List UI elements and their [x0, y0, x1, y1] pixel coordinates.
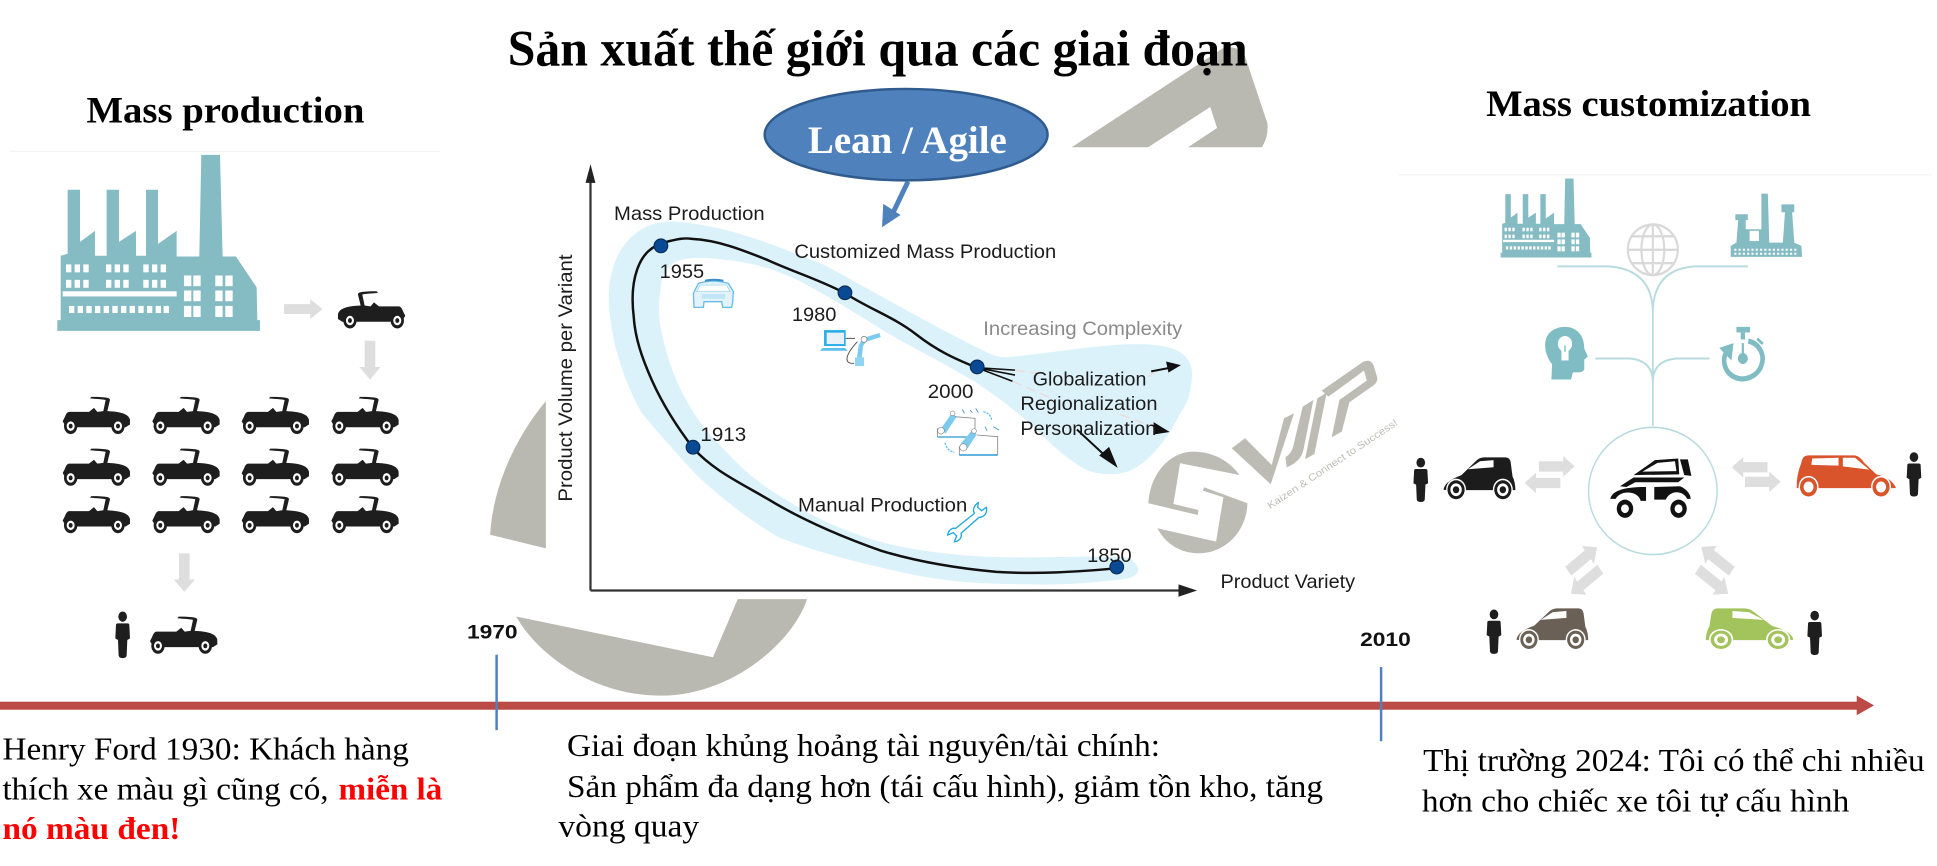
central circle — [1589, 427, 1717, 555]
text block: Henry Ford quote: thích xe màu gì cũng có, — [2, 770, 329, 806]
timeline marker: 2010: 2010 — [1360, 629, 1411, 651]
diagram: factory to cars to customer — [57, 155, 405, 658]
chart labels: 1980 — [792, 304, 836, 326]
customer: brown car — [1487, 608, 1588, 654]
callout: lean / agile ellipse — [765, 89, 1048, 180]
chart labels: Manual Production — [798, 494, 967, 516]
chart labels: Product Volume per Variant — [555, 254, 577, 502]
text block: crisis period — [558, 727, 1323, 843]
timeline marker: 2010 — [1360, 629, 1411, 741]
icon: large factory — [1501, 179, 1591, 258]
text block: crisis period: Sản phẩm đa dạng hơn (tái cấu hình), giảm tồn kho, tăng — [567, 768, 1323, 804]
callout: lean / agile ellipse: Lean / Agile — [808, 118, 1007, 162]
arrow: down to customer — [174, 553, 195, 592]
chart: production volume vs product variety — [555, 164, 1355, 597]
icon: globe — [1628, 224, 1678, 275]
chart: branching fan lines — [977, 368, 1155, 427]
arrow: lean / agile to customized mass production — [882, 182, 908, 227]
chart labels: Mass Production — [614, 203, 765, 225]
timeline marker: 1970: 1970 — [467, 622, 518, 644]
chart data points — [654, 239, 1124, 574]
connector lines — [1557, 266, 1748, 426]
text block: market 2024 — [1422, 742, 1925, 819]
icon: customer car — [150, 617, 217, 654]
chart icons: car and computer with robot — [693, 280, 880, 366]
text block: Henry Ford quote: miễn là — [338, 770, 442, 806]
icon: first car — [338, 291, 405, 328]
icon: exploded central car — [1610, 459, 1691, 518]
timeline marker: 1970 — [467, 622, 518, 730]
chart icons: robots and wrench — [937, 408, 999, 542]
timeline arrow — [0, 696, 1874, 715]
chart labels — [555, 203, 1355, 593]
arrow: factory to car — [284, 299, 323, 319]
icon: wrench — [948, 503, 987, 542]
customer: black car — [1413, 457, 1515, 502]
customer: green car — [1706, 608, 1822, 655]
panel: mass production — [10, 90, 440, 658]
title: Sản xuất thế giới qua các giai đoạn — [508, 20, 1248, 76]
icon: head with light bulb — [1545, 327, 1588, 379]
chart labels: Personalization — [1020, 418, 1156, 440]
panel: mass customization — [1398, 84, 1932, 655]
text block: crisis period: Giai đoạn khủng hoảng tài nguyên/tài chính: — [567, 727, 1160, 763]
heading: mass production: Mass production — [86, 90, 365, 131]
heading: mass customization: Mass customization — [1486, 84, 1811, 125]
chart labels: Regionalization — [1020, 393, 1158, 415]
chart labels: Globalization — [1033, 368, 1146, 390]
logo: VJIP watermark — [1148, 361, 1400, 553]
chart curve: production trajectory — [633, 238, 1118, 573]
chart band: light blue trajectory — [609, 222, 1192, 585]
arrow: down to car grid — [359, 341, 381, 379]
chart labels: Increasing Complexity — [983, 318, 1182, 340]
text block: Henry Ford quote — [2, 731, 442, 846]
icon: car front — [693, 280, 733, 307]
chart labels: 2000 — [928, 381, 973, 403]
diagram: customization network — [1413, 179, 1921, 655]
chart arrows: branches — [1077, 361, 1181, 468]
chart labels: Customized Mass Production — [794, 241, 1056, 263]
icon: computer and robot arm — [820, 330, 880, 366]
text block: market 2024: Thị trường 2024: Tôi có thể chi nhiều — [1423, 742, 1925, 778]
icon: stopwatch — [1719, 327, 1766, 383]
chart labels: Product Variety — [1221, 571, 1355, 593]
chart labels: 1913 — [700, 424, 746, 446]
arrows: exchange with customers — [1525, 456, 1781, 603]
icon: robots in cell — [937, 408, 999, 455]
text block: Henry Ford quote: nó màu đen! — [2, 810, 180, 846]
text block: Henry Ford quote: Henry Ford 1930: Khách hàng — [2, 731, 409, 767]
icon: refinery — [1731, 194, 1802, 257]
text block: crisis period: vòng quay — [558, 807, 699, 843]
customer: orange car — [1797, 452, 1921, 498]
icon grid: twelve cars — [63, 397, 399, 533]
watermark: large grey logo ring pieces — [490, 47, 1268, 696]
icon: customer — [115, 612, 130, 658]
logo tagline: Kaizen & Connect to Success! — [1266, 418, 1400, 512]
icon: factory — [57, 155, 260, 331]
logo letters — [1232, 361, 1377, 484]
chart labels: 1955 — [660, 261, 704, 283]
text block: market 2024: hơn cho chiếc xe tôi tự cấu hình — [1422, 783, 1849, 819]
chart labels: 1850 — [1087, 545, 1132, 567]
chart axes — [586, 164, 1197, 597]
